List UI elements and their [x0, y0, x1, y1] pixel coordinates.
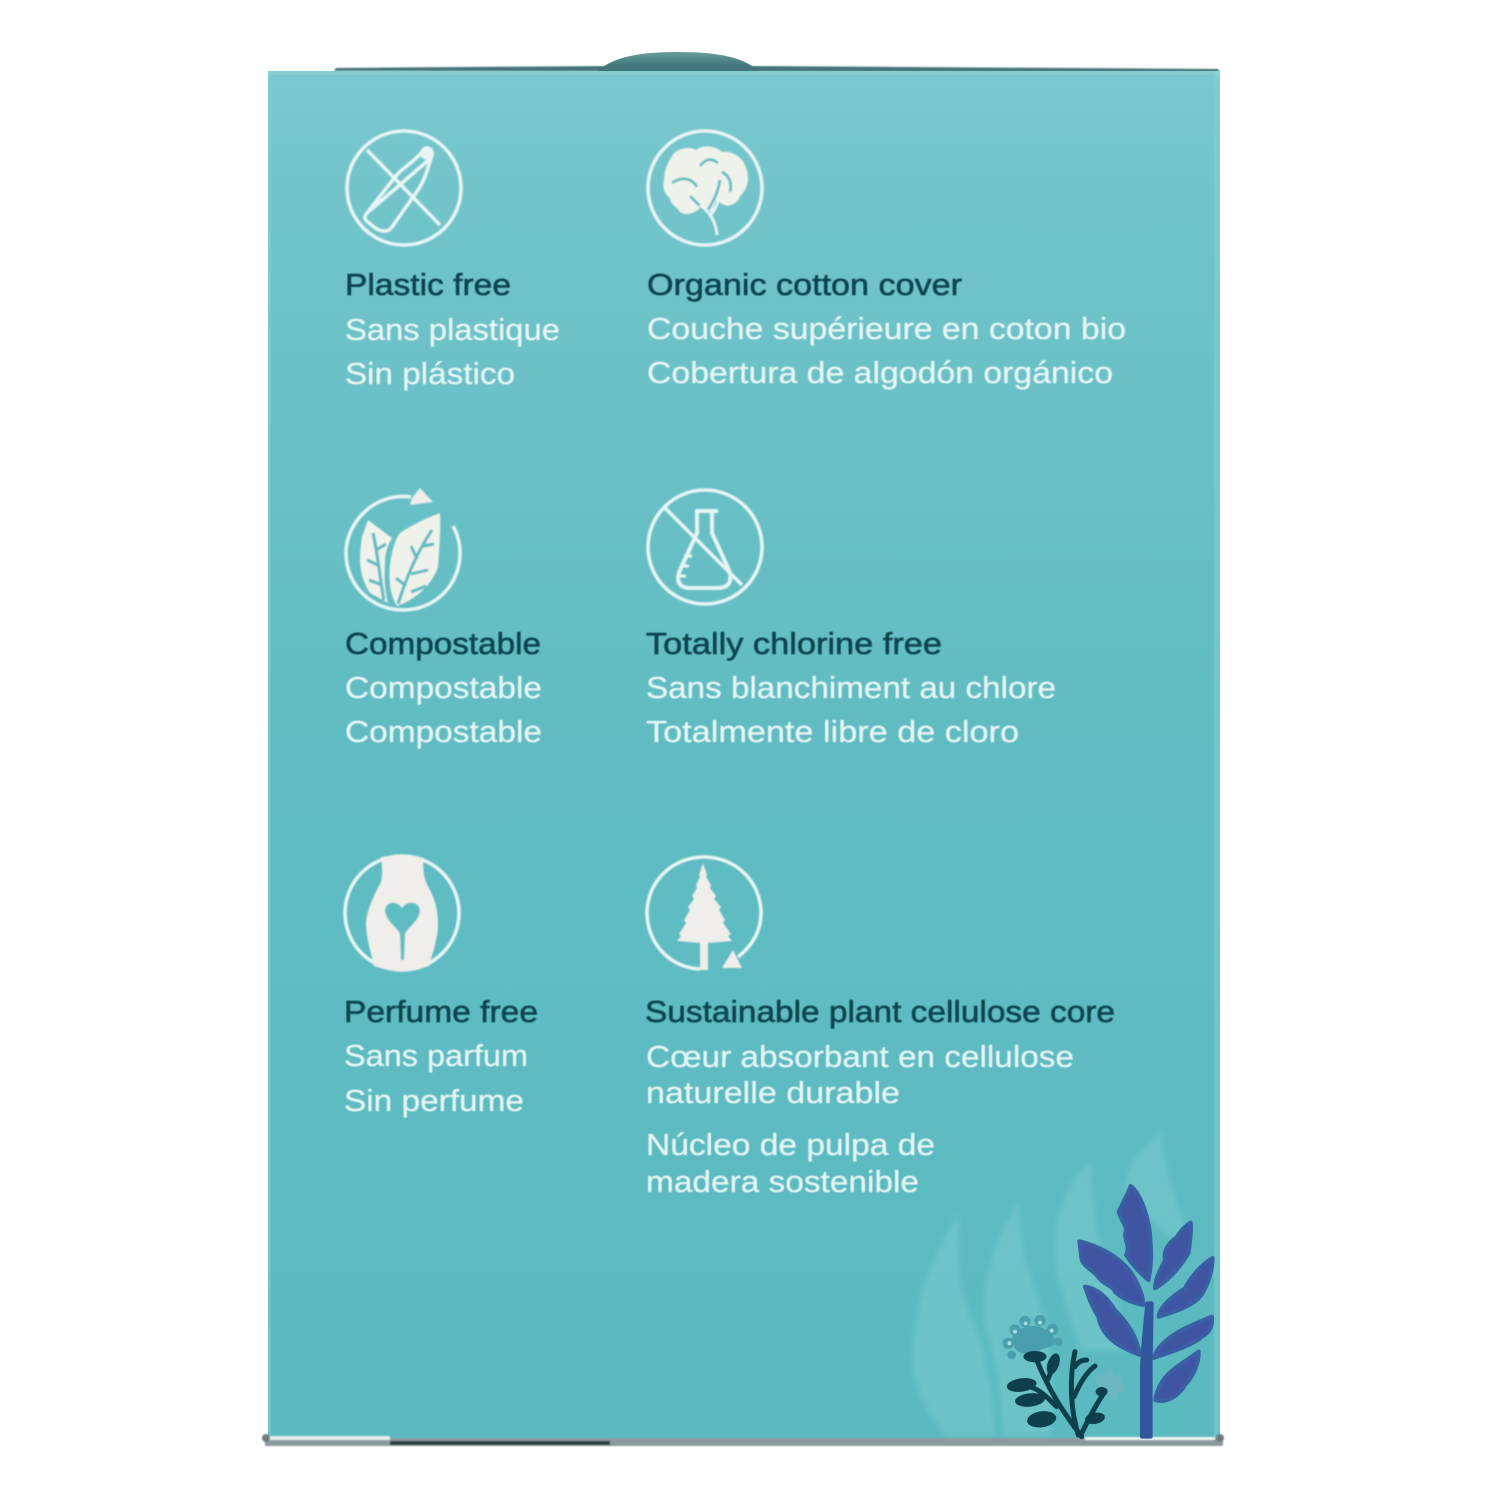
icon: body silhouette with heart: [345, 856, 459, 970]
heading: totally chlorine free: Totally chlorine free: [646, 626, 942, 661]
text: French and Spanish translations: [345, 670, 542, 749]
box top tab: [334, 52, 1220, 72]
icon: cotton boll: [648, 131, 762, 245]
text: French and Spanish translations: [345, 312, 560, 391]
text: French translation: [646, 1039, 1074, 1110]
text: French and Spanish translations: Cobertura de algodón orgánico: [647, 355, 1113, 390]
heading: plastic free: Plastic free: [345, 267, 511, 302]
icon: crossed-out lab flask: [648, 490, 762, 604]
text: French and Spanish translations: Totalmente libre de cloro: [646, 714, 1019, 749]
text: French and Spanish translations: Sans plastique: [345, 312, 560, 347]
text: Spanish translation: [646, 1127, 935, 1199]
feature: compostable: [345, 488, 542, 749]
text: French and Spanish translations: [647, 311, 1126, 390]
icon: crossed-out plastic bottle: [347, 131, 461, 245]
icon: pine tree with circular arrow: [647, 857, 761, 970]
text: French translation: Cœur absorbant en cellulose: [646, 1039, 1074, 1074]
box bottom edge: [262, 1434, 1224, 1446]
box front panel: [268, 71, 1220, 1439]
heading: organic cotton cover: Organic cotton cover: [647, 267, 962, 302]
feature: organic cotton cover: [647, 131, 1126, 390]
text: French and Spanish translations: Sans parfum: [344, 1038, 528, 1073]
text: French and Spanish translations: Sin perfume: [344, 1083, 524, 1118]
text: French translation: naturelle durable: [646, 1075, 900, 1110]
feature: plastic free: [345, 131, 560, 391]
text: Spanish translation: madera sostenible: [646, 1164, 919, 1199]
illustration: dark sprigs with teal flowers: [1003, 1315, 1124, 1437]
text: French and Spanish translations: Couche supérieure en coton bio: [647, 311, 1126, 346]
icon: leaves with circular arrow: [346, 488, 460, 610]
heading: sustainable plant cellulose core: Sustainable plant cellulose core: [645, 994, 1115, 1029]
text: French and Spanish translations: [344, 1038, 528, 1118]
text: French and Spanish translations: Compostable: [345, 714, 542, 749]
decorative pale flame shapes: [913, 1133, 1190, 1437]
feature: perfume free: [344, 856, 538, 1118]
text: French and Spanish translations: Sans blanchiment au chlore: [646, 670, 1056, 705]
feature: sustainable plant cellulose core: [645, 857, 1115, 1199]
text: French and Spanish translations: [646, 670, 1056, 749]
text: French and Spanish translations: Compostable: [345, 670, 542, 705]
illustration: blue leafy plant: [1079, 1186, 1213, 1437]
text: French and Spanish translations: Sin plástico: [345, 356, 515, 391]
feature: totally chlorine free: [646, 490, 1056, 749]
heading: compostable: Compostable: [345, 626, 541, 661]
text: Spanish translation: Núcleo de pulpa de: [646, 1127, 935, 1162]
heading: perfume free: Perfume free: [344, 994, 538, 1029]
